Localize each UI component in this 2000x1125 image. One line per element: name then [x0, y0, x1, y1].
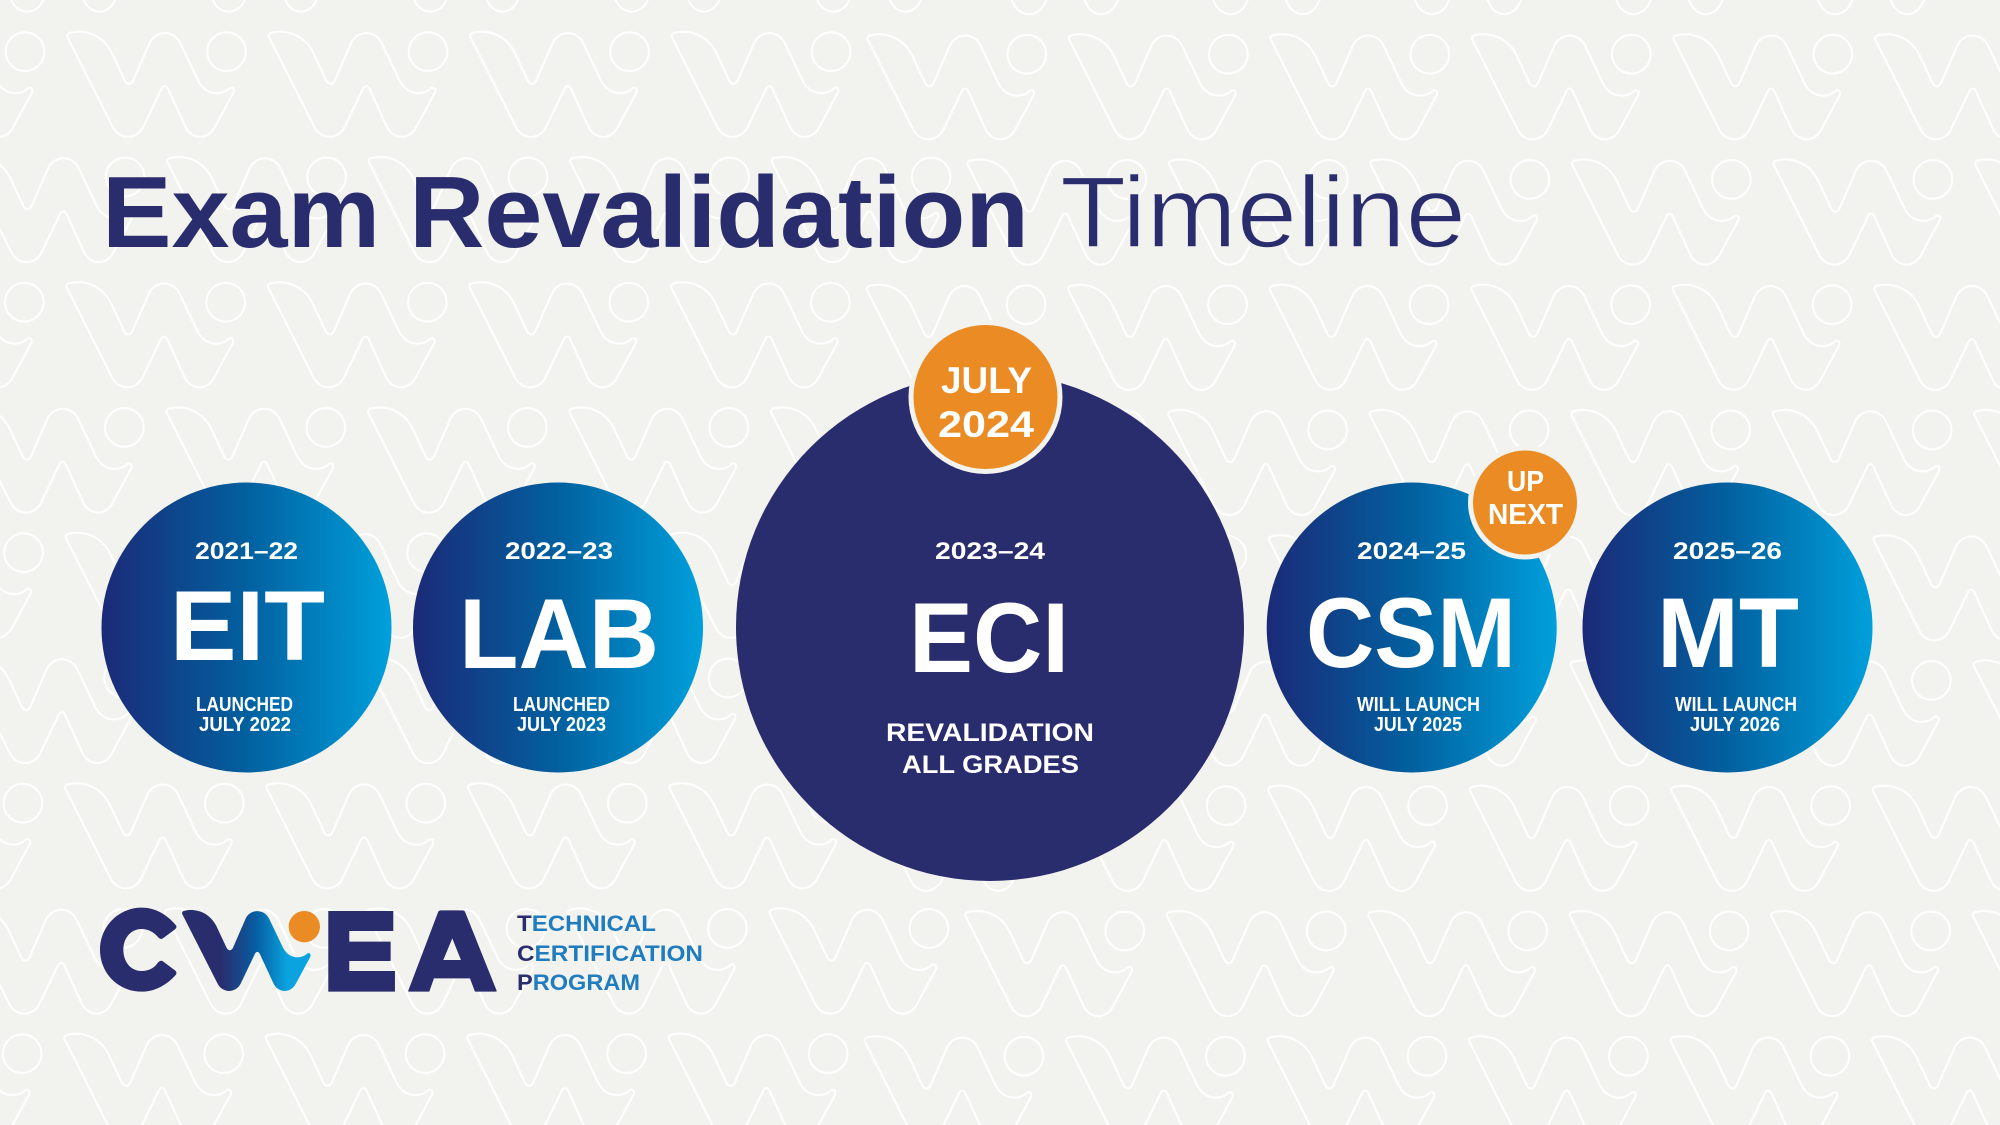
logo: CWEA Technical Certification Program — [100, 908, 703, 995]
circle: MT: JULY 2026 — [1690, 714, 1780, 736]
logo mark: CWEA — [100, 908, 497, 992]
circle: CSM: WILL LAUNCH — [1357, 694, 1480, 716]
circle: MT: 2025–26 — [1673, 538, 1782, 565]
title: Exam Revalidation — [102, 157, 1029, 269]
badge: Up Next: UP — [1507, 466, 1544, 498]
circle: LAB: 2022–23 — [505, 538, 613, 565]
title: Timeline — [1060, 157, 1466, 269]
badge: Up Next — [1468, 446, 1582, 560]
circle: CSM: JULY 2025 — [1374, 714, 1462, 736]
badge: Up Next: NEXT — [1488, 499, 1563, 531]
logo text: PROGRAM — [517, 970, 640, 995]
circle: ECI: REVALIDATION — [886, 719, 1094, 747]
circle: CSM: CSM — [1306, 577, 1516, 688]
circle: LAB — [413, 482, 703, 772]
circle: EIT: LAUNCHED — [196, 694, 293, 716]
badge: July 2024 — [908, 320, 1062, 474]
circle: CSM: 2024–25 — [1357, 538, 1466, 565]
circle: LAB: LAUNCHED — [513, 694, 610, 716]
title — [102, 157, 1466, 269]
circle: MT: MT — [1657, 577, 1799, 688]
circle: MT — [1582, 482, 1872, 772]
circle: EIT: 2021–22 — [195, 538, 298, 565]
circle: ECI — [736, 373, 1244, 881]
circle: MT: WILL LAUNCH — [1675, 694, 1797, 716]
circle: ECI: 2023–24 — [935, 538, 1046, 565]
circle: ECI: ECI — [909, 582, 1069, 693]
circle: LAB: JULY 2023 — [517, 714, 606, 736]
circle: EIT — [102, 482, 392, 772]
circle: ECI: ALL GRADES — [902, 751, 1079, 779]
circle: EIT: JULY 2022 — [199, 714, 291, 736]
logo text: TECHNICAL — [517, 911, 656, 936]
logo text: CERTIFICATION — [517, 941, 703, 966]
circle: EIT: EIT — [170, 570, 325, 681]
badge: July 2024: JULY — [941, 360, 1032, 401]
badge: July 2024: 2024 — [938, 404, 1034, 445]
circle: LAB: LAB — [459, 578, 659, 689]
circle: CSM — [1267, 482, 1557, 772]
logo text — [517, 911, 703, 995]
